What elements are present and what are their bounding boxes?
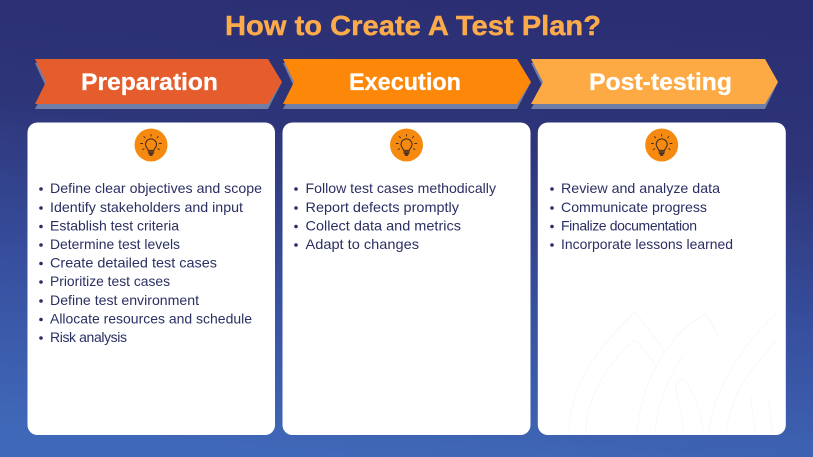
arrow: Execution (283, 59, 531, 109)
checklist: post-testing steps: Finalize documentation (561, 218, 697, 234)
checklist: post-testing steps: Communicate progress (561, 199, 707, 215)
checklist: post-testing steps: Incorporate lessons learned (561, 236, 733, 252)
checklist: execution steps: Follow test cases methodically (306, 180, 496, 196)
icon: light bulb (134, 128, 168, 162)
arrow: Post-testing: Post-testing (589, 69, 732, 96)
checklist: preparation steps: Define test environment (50, 292, 199, 308)
watermark: faint flame outlines (569, 312, 777, 433)
icon: light bulb (390, 128, 423, 162)
checklist: preparation steps: Risk analysis (50, 329, 127, 345)
icon: light bulb (645, 128, 678, 162)
arrow: Preparation: Preparation (81, 69, 218, 96)
checklist: preparation steps: Determine test levels (50, 236, 180, 252)
checklist: preparation steps: Establish test criteria (50, 218, 179, 234)
checklist: preparation steps: Prioritize test cases (50, 273, 170, 289)
checklist: post-testing steps (550, 180, 733, 252)
checklist: preparation steps: Allocate resources and schedule (50, 310, 252, 326)
arrow: Post-testing (531, 59, 778, 109)
panel: Execution (282, 122, 530, 435)
title: How to Create A Test Plan? (225, 10, 601, 41)
checklist: preparation steps: Create detailed test cases (50, 254, 217, 270)
checklist: preparation steps (39, 180, 262, 345)
checklist: preparation steps: Identify stakeholders and input (50, 199, 243, 215)
checklist: post-testing steps: Review and analyze data (561, 180, 720, 196)
checklist: execution steps: Report defects promptly (306, 199, 459, 215)
checklist: execution steps: Adapt to changes (306, 236, 419, 252)
arrow: Preparation (35, 59, 282, 109)
panel: Post-testing (538, 122, 786, 435)
checklist: execution steps (294, 180, 496, 252)
panel: Preparation (28, 122, 275, 435)
arrow: Execution: Execution (349, 69, 461, 96)
checklist: preparation steps: Define clear objectives and scope (50, 180, 262, 196)
checklist: execution steps: Collect data and metrics (306, 218, 461, 234)
